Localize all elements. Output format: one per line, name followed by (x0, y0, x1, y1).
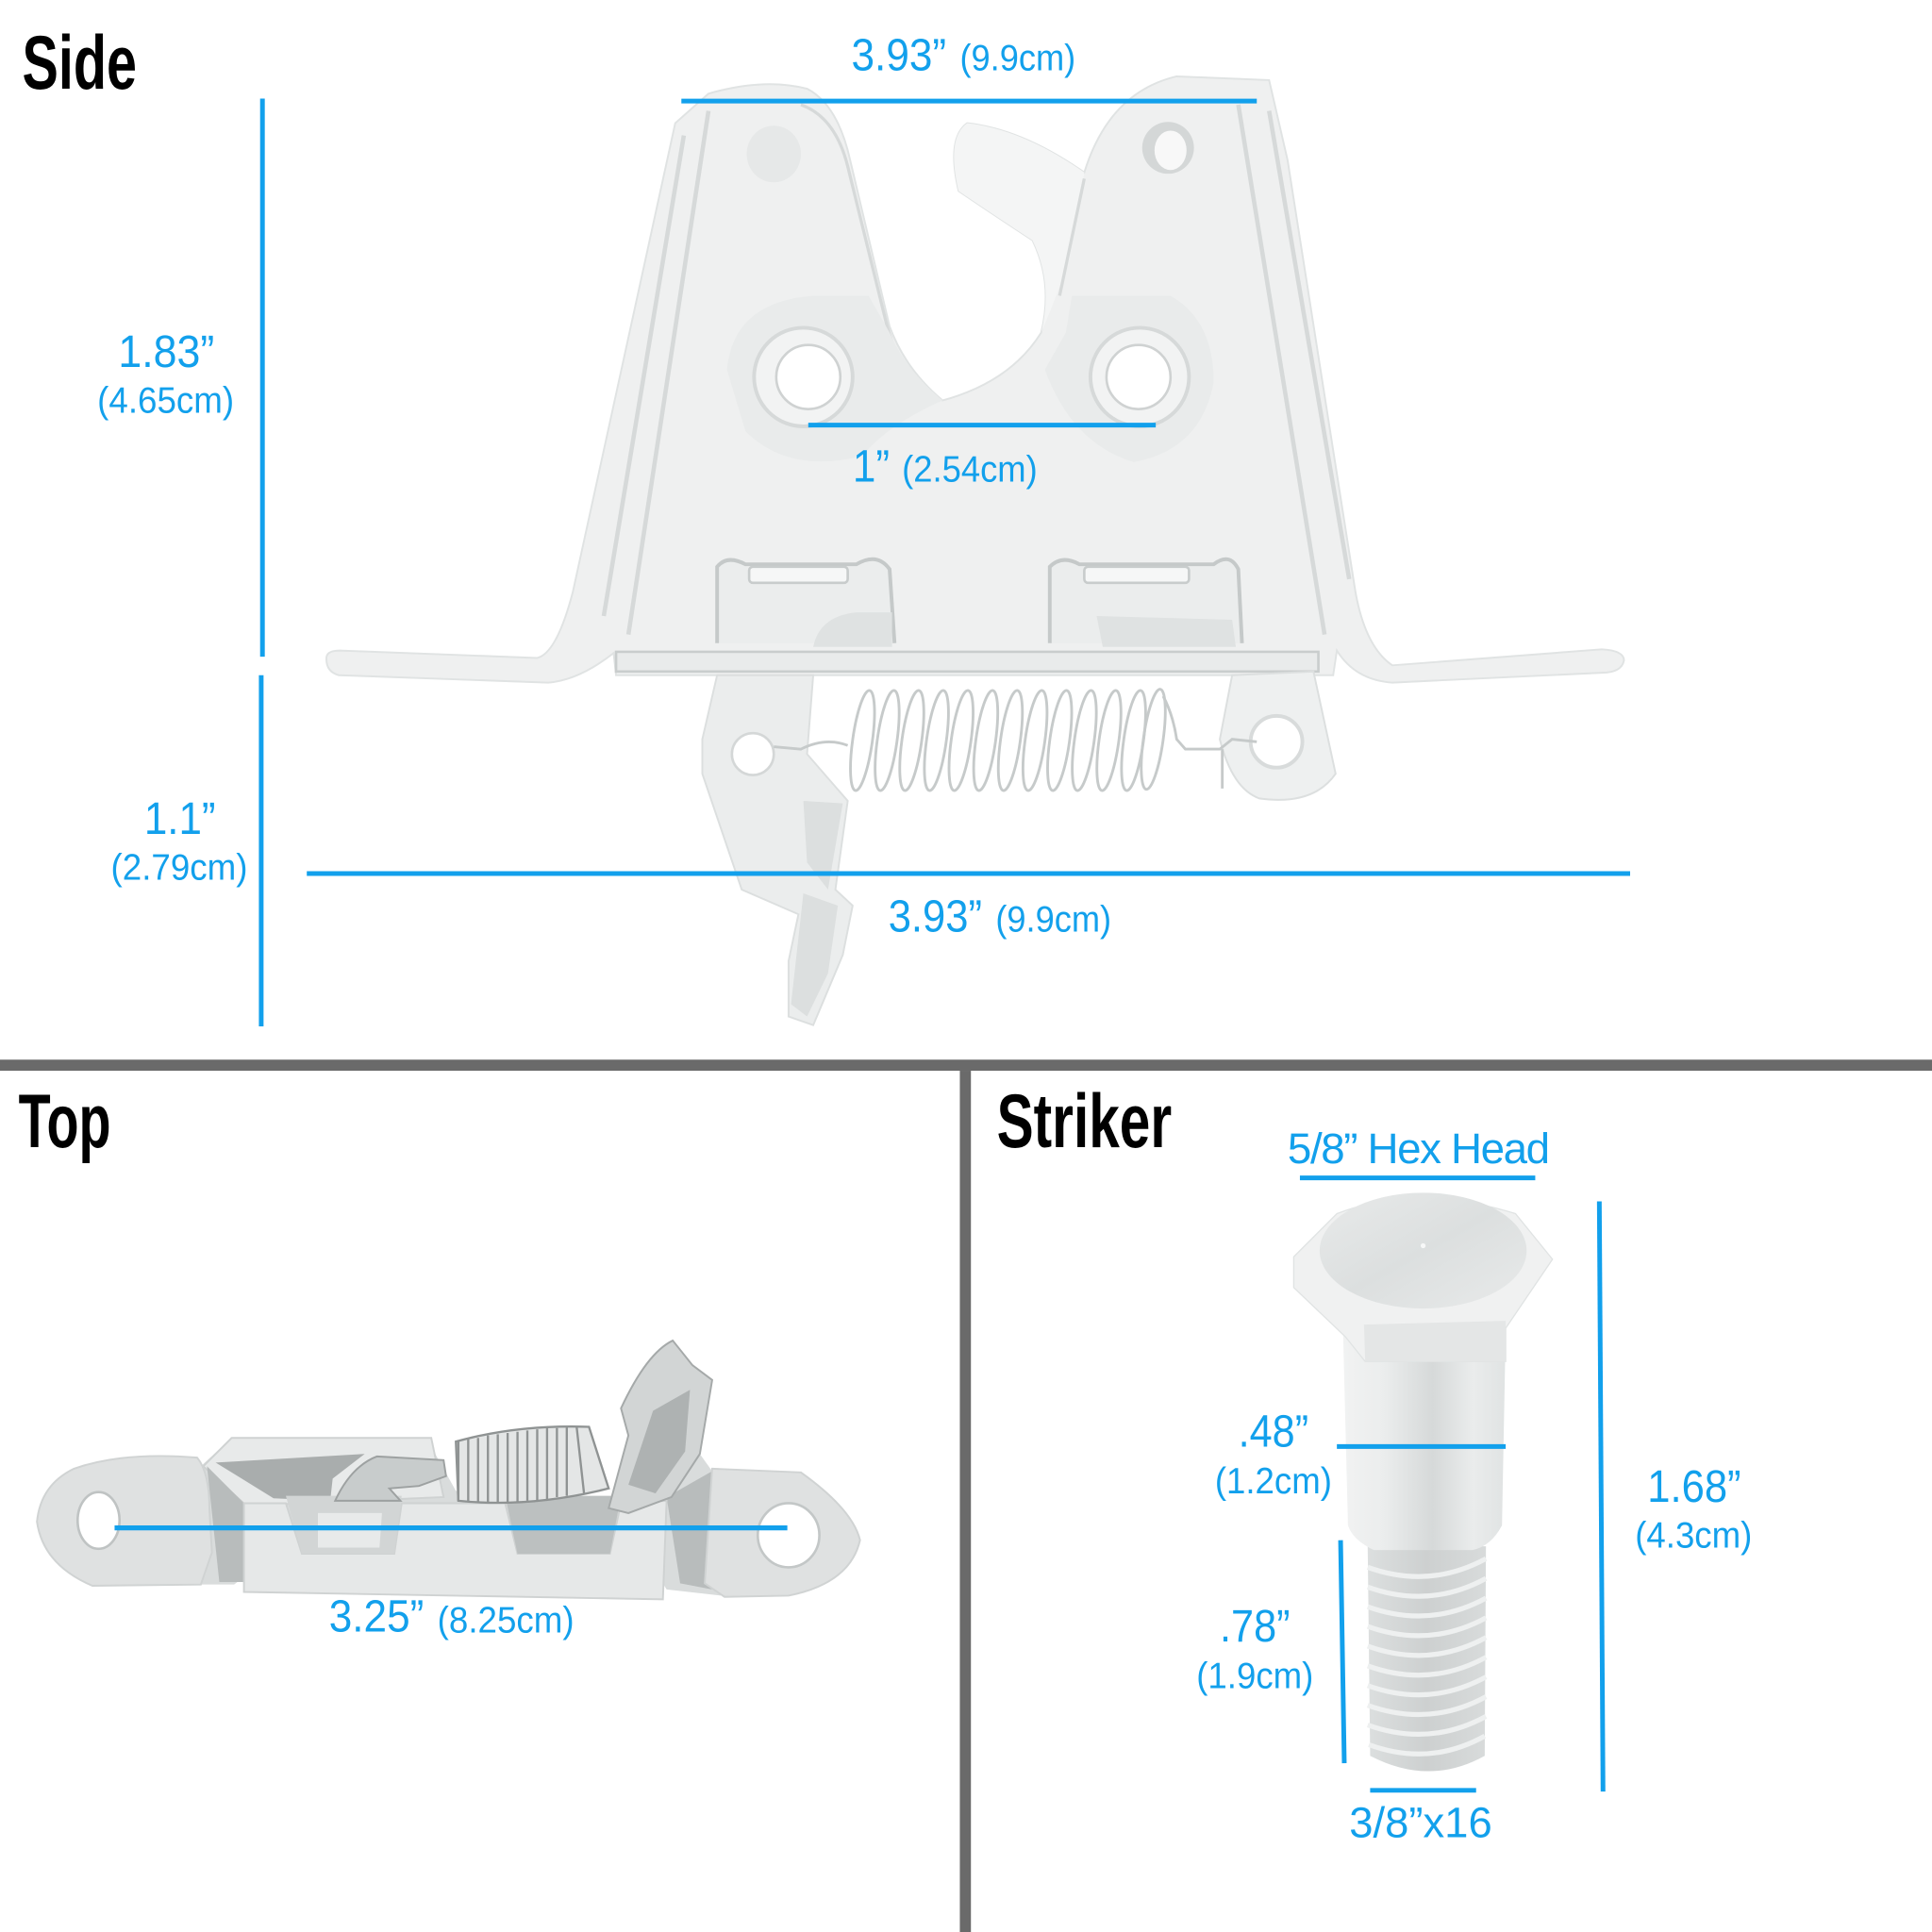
dimension: thread length: (1.9cm) (1196, 1656, 1313, 1696)
hex head (1293, 1198, 1553, 1361)
panel dividers (0, 1059, 1932, 1932)
dimension: lower height: 1.1” (144, 793, 216, 844)
illustration: striker bolt (1293, 1192, 1553, 1772)
heading: Side: Side (23, 21, 137, 106)
boss around mounting holes (727, 295, 942, 461)
dimension: overall width: 3.93” (889, 891, 982, 941)
heading: Striker: Striker (997, 1079, 1172, 1164)
dimension: hole centres: (8.25cm) (438, 1601, 575, 1641)
dimension: lower height (111, 675, 261, 1026)
dimension: upper height (97, 98, 262, 657)
panel: top view (19, 1079, 860, 1641)
dimension: shank diameter: .48” (1239, 1406, 1308, 1457)
illustration: latch side view (326, 76, 1624, 1025)
dimension: hole spacing: (2.54cm) (902, 450, 1038, 491)
spring (774, 688, 1257, 791)
cam (335, 1457, 446, 1501)
dimension: upper height: 1.83” (118, 326, 214, 377)
spring (456, 1426, 608, 1503)
dimension: top width: (9.9cm) (959, 38, 1075, 78)
back box (204, 1438, 443, 1506)
dimension: lower height: (2.79cm) (111, 848, 248, 889)
latch plate (326, 76, 1624, 683)
slots in plate (717, 559, 894, 643)
shank (1343, 1331, 1506, 1550)
dimension: overall width: (9.9cm) (995, 899, 1111, 940)
front plate (244, 1501, 667, 1599)
back silhouette (201, 1438, 721, 1595)
dimension: thread size: 3/8”x16 (1349, 1798, 1492, 1846)
heading: Top: Top (19, 1079, 111, 1164)
side edges (604, 105, 1349, 635)
thread lines (1368, 1558, 1486, 1754)
dark recess (216, 1454, 365, 1501)
dimension: hole centres (114, 1528, 788, 1641)
left ear (37, 1456, 212, 1586)
side shadow strips (207, 1466, 712, 1590)
dimension: top width: 3.93” (852, 29, 946, 80)
left lever (702, 675, 853, 1025)
threaded end (1368, 1546, 1486, 1772)
dimension: hex head: 5/8” Hex Head (1288, 1124, 1550, 1173)
mounting holes (754, 327, 853, 426)
dimension: upper height: (4.65cm) (97, 381, 234, 422)
dimension: hole centres: 3.25” (329, 1591, 424, 1641)
panel: side view (23, 21, 1630, 1026)
front plate slots (286, 1496, 402, 1554)
hex top face (1320, 1192, 1526, 1308)
hex front face (1364, 1321, 1506, 1361)
dimension: thread length: .78” (1220, 1601, 1291, 1652)
dimension: thread length (1196, 1541, 1344, 1763)
dimension: top width (681, 29, 1257, 101)
dimension: shank diameter (1215, 1406, 1506, 1502)
bottom rail (616, 652, 1319, 672)
dimension: hole spacing (808, 425, 1156, 492)
dimension: overall length (1599, 1201, 1752, 1791)
illustration: latch top view (37, 1341, 860, 1599)
dimension: overall width (307, 874, 1630, 941)
lever (608, 1341, 712, 1513)
dimension: hole spacing: 1” (853, 441, 890, 492)
right ear (705, 1469, 860, 1597)
rivets (747, 125, 801, 182)
dimension: overall length: 1.68” (1647, 1461, 1741, 1512)
panel: striker (997, 1079, 1752, 1846)
latch hook (954, 124, 1084, 333)
dimension: shank diameter: (1.2cm) (1215, 1461, 1332, 1502)
right lever (1220, 672, 1336, 800)
dimension: overall length: (4.3cm) (1635, 1515, 1752, 1556)
